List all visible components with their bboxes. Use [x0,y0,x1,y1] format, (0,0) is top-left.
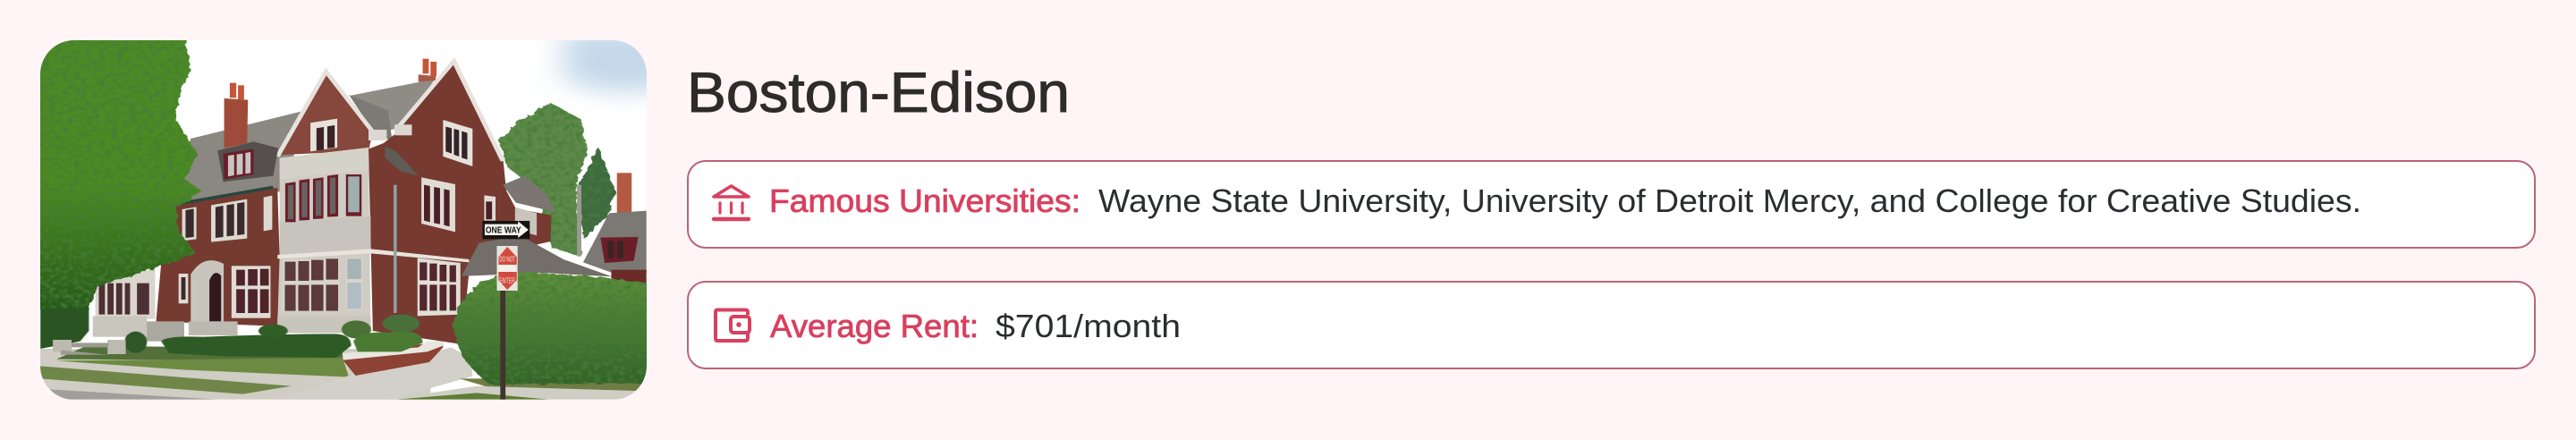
pole [577,185,581,257]
arched porch [143,260,238,342]
bay lower windows [277,258,370,333]
card: average rent [688,282,2535,368]
photo: brick house in Boston-Edison: DO NOT [499,256,515,264]
side roof right [503,176,555,212]
bay upper windows [285,174,361,222]
right gable brick wall [369,64,552,344]
right gable ground windows [394,185,537,316]
low-pitched porch roof [462,235,612,276]
label: average rent: Average Rent: [770,308,979,344]
sky cloud [547,40,647,104]
left wing windows [179,196,272,318]
value: universities list: Wayne State University, University of Detroit Mercy, and College for Creative Studies. [1098,182,2361,219]
left tree [26,36,201,310]
chimneys [225,59,436,148]
sign post [500,291,505,400]
upper roof [352,79,435,131]
left side porch windows [93,270,156,337]
icon: university building [714,186,749,219]
left eave [167,187,273,206]
do not enter sign: ENTER [499,277,515,285]
small dark roof over bay [385,146,419,176]
left main roof [184,111,301,200]
right gable trim [395,61,503,161]
label: famous universities: Famous Universities: [769,182,1080,219]
centre gable [278,73,373,155]
one way sign [482,221,530,239]
bay stonework [277,148,469,333]
value: rent amount: $701/month [996,308,1181,344]
icon: wallet [716,309,750,341]
one way sign: ONE WAY [486,225,521,235]
lawn and pavement [40,346,647,400]
gable windows [310,119,496,232]
hedges and shrubs [40,309,423,358]
centre gable trim [277,72,375,157]
do not enter sign [496,246,518,291]
photo: brick house in Boston-Edison [26,30,676,400]
card outline [688,282,2535,368]
front steps [53,340,126,355]
large rounded bush [453,272,659,385]
background trees [498,103,615,257]
card: famous universities [688,161,2535,248]
neighbouring house [583,173,647,284]
left wing brick wall [156,188,282,326]
title: Boston-Edison [687,62,1070,124]
low garden wall [343,342,443,376]
card outline [688,161,2535,248]
dormer [217,141,278,182]
